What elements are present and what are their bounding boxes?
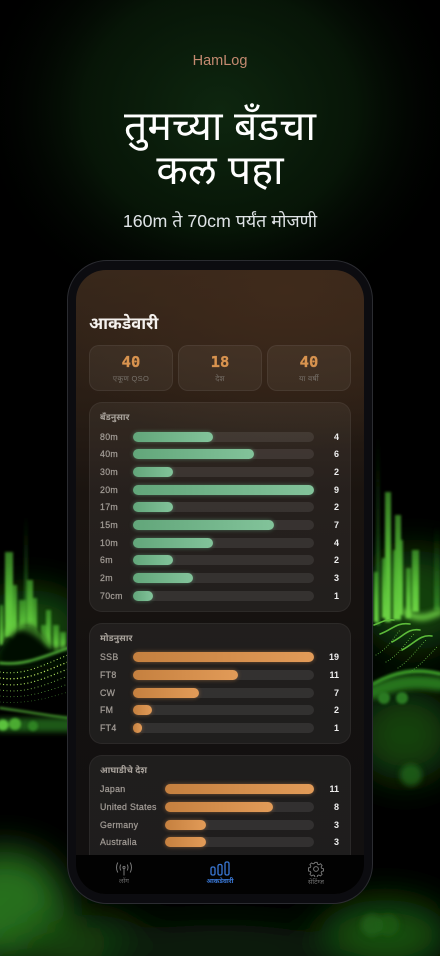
bar: Australia: 3 bbox=[334, 837, 339, 847]
bar: CW: 7 bbox=[334, 688, 339, 698]
bar: 40m: 6 bbox=[334, 449, 339, 459]
right spectrum bars bbox=[374, 435, 440, 625]
bar: FT8: FT8 bbox=[100, 670, 117, 680]
stat card: this year bbox=[267, 345, 351, 391]
panel heading: मोडनुसार bbox=[100, 633, 132, 643]
stat card: countries: 18 bbox=[211, 353, 229, 371]
bar: 80m: 4 bbox=[334, 432, 339, 442]
bar: United States bbox=[100, 800, 339, 814]
stat card: total QSO: एकूण QSO bbox=[113, 374, 149, 383]
bar: Germany: Germany bbox=[100, 820, 138, 830]
panel heading: बँडनुसार bbox=[100, 412, 130, 422]
bar: SSB: SSB bbox=[100, 652, 119, 662]
bar: 15m: 15m bbox=[100, 520, 118, 530]
icon: antenna bbox=[116, 862, 132, 876]
bar: Japan bbox=[100, 782, 339, 796]
bar: 2m: 2m bbox=[100, 573, 113, 583]
tab bar bbox=[76, 855, 364, 894]
bar: FM: 2 bbox=[334, 705, 339, 715]
bar: 2m bbox=[100, 570, 339, 586]
bar: 30m bbox=[100, 464, 339, 480]
stat card: this year: 40 bbox=[300, 353, 318, 371]
stat card: total QSO: 40 bbox=[122, 353, 140, 371]
panel: by band bbox=[89, 402, 351, 612]
tab: settings bbox=[308, 862, 324, 886]
bar: Australia bbox=[100, 834, 339, 850]
bar: CW bbox=[100, 686, 339, 700]
bar: CW: CW bbox=[100, 688, 115, 698]
bar: 20m: 9 bbox=[334, 485, 339, 495]
bar: 10m bbox=[100, 536, 339, 550]
phone frame bbox=[67, 260, 373, 904]
bar: 2m: 3 bbox=[334, 573, 339, 583]
bar: 70cm: 1 bbox=[334, 591, 339, 601]
bar: Germany: 3 bbox=[334, 820, 339, 830]
bar: 40m: 40m bbox=[100, 449, 118, 459]
bar: 40m bbox=[100, 446, 339, 462]
tab label: आकडेवारी bbox=[206, 878, 234, 885]
bar: 6m: 2 bbox=[334, 555, 339, 565]
bar: 20m bbox=[100, 482, 339, 498]
bar: FM: FM bbox=[100, 705, 113, 715]
tab: log bbox=[116, 862, 132, 885]
bar: FT4 bbox=[100, 721, 339, 735]
bar: 80m bbox=[100, 430, 339, 444]
tab: statistics (active) bbox=[206, 861, 234, 885]
bar: FM bbox=[100, 702, 339, 718]
bar: FT4: FT4 bbox=[100, 723, 117, 733]
bar: 15m bbox=[100, 518, 339, 532]
stat card: this year: या वर्षी bbox=[299, 374, 319, 383]
bar: 80m: 80m bbox=[100, 432, 118, 442]
tab label: सेटिंग्ज bbox=[308, 879, 324, 886]
bar: FT4: 1 bbox=[334, 723, 339, 733]
screen title: आकडेवारी bbox=[89, 314, 158, 333]
bar: 20m: 20m bbox=[100, 485, 118, 495]
phone screen: statistics bbox=[76, 270, 364, 894]
bar: 70cm bbox=[100, 588, 339, 604]
bar: Japan: Japan bbox=[100, 784, 125, 794]
bar: 30m: 30m bbox=[100, 467, 118, 477]
bar: 15m: 7 bbox=[334, 520, 339, 530]
bar: 17m: 2 bbox=[334, 502, 339, 512]
main heading: तुमच्या बँडचा bbox=[124, 103, 316, 149]
bar: 6m: 6m bbox=[100, 555, 113, 565]
waves: glow lines and particle mesh bbox=[0, 612, 440, 725]
bar: Australia: Australia bbox=[100, 837, 137, 847]
panel: by mode bbox=[89, 623, 351, 744]
bar: FT8: 11 bbox=[329, 670, 339, 680]
bar: 17m bbox=[100, 500, 339, 514]
icon: bars bbox=[210, 861, 230, 876]
panel heading: आघाडीचे देश bbox=[100, 765, 147, 775]
bar: SSB bbox=[100, 650, 339, 664]
stat card: total QSO bbox=[89, 345, 173, 391]
bar: 17m: 17m bbox=[100, 502, 118, 512]
bar: 6m bbox=[100, 552, 339, 568]
stat card: countries bbox=[178, 345, 262, 391]
bar: 10m: 10m bbox=[100, 538, 118, 548]
panel: top countries bbox=[89, 755, 351, 897]
main heading bbox=[124, 103, 317, 193]
left spectrum bars bbox=[0, 515, 66, 655]
bar: SSB: 19 bbox=[329, 652, 339, 662]
icon: gear bbox=[308, 862, 324, 877]
bar: 70cm: 70cm bbox=[100, 591, 123, 601]
bar: Germany bbox=[100, 818, 339, 832]
bar: United States: 8 bbox=[334, 802, 339, 812]
stat card: countries: देश bbox=[215, 374, 225, 383]
subtitle: 160m ते 70cm पर्यंत मोजणी bbox=[123, 211, 317, 231]
main heading: कल पहा bbox=[156, 147, 284, 193]
bar: 10m: 4 bbox=[334, 538, 339, 548]
bar: 30m: 2 bbox=[334, 467, 339, 477]
bar: Japan: 11 bbox=[329, 784, 339, 794]
tab label: लॉग bbox=[119, 878, 129, 885]
bar: FT8 bbox=[100, 668, 339, 682]
brand name: HamLog bbox=[193, 53, 247, 69]
bar: United States: United States bbox=[100, 802, 157, 812]
